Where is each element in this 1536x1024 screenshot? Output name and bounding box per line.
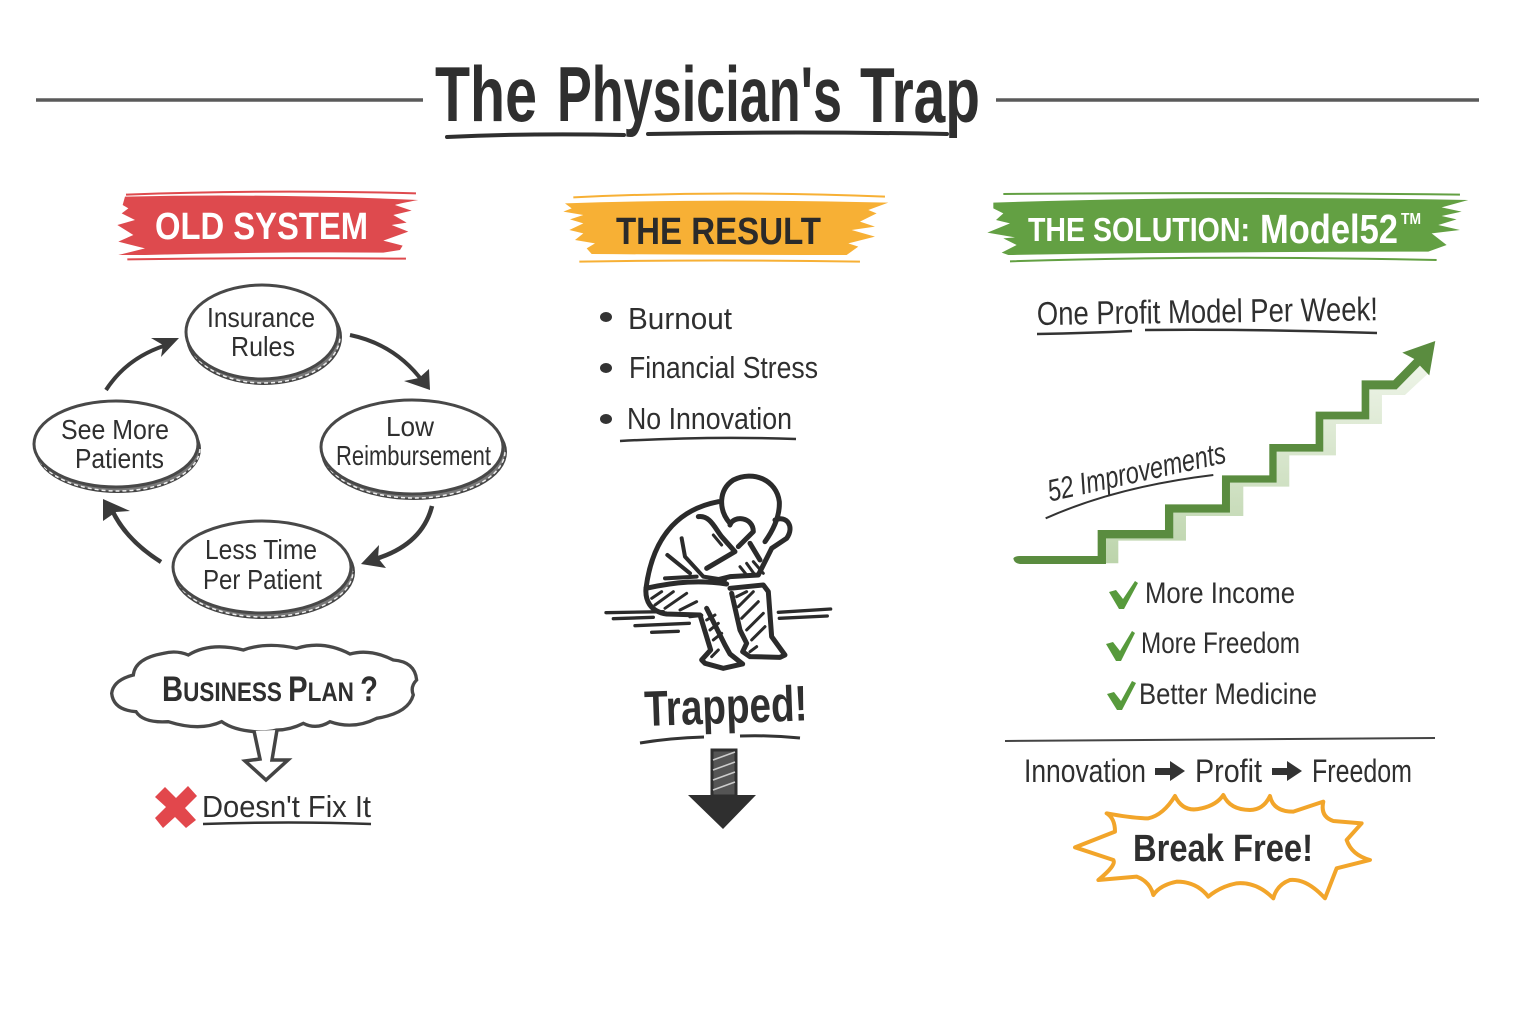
- title: Physician's: [557, 50, 842, 138]
- icon: check: [1107, 681, 1136, 710]
- flow: innovation profit freedom: Innovation: [1024, 753, 1146, 789]
- panel: the result: [563, 193, 888, 829]
- title: The: [435, 50, 537, 138]
- heading: the result banner: THE RESULT: [616, 211, 821, 253]
- arrow: outline down: [245, 730, 288, 780]
- node: insurance rules: Insurance: [207, 302, 315, 333]
- panel: the solution: [987, 193, 1468, 898]
- text: trapped: [640, 675, 808, 743]
- list: consequences: Financial Stress: [629, 350, 818, 385]
- node: low reimbursement: [321, 400, 506, 499]
- heading: old system banner: [117, 192, 418, 259]
- title: [36, 50, 1479, 139]
- list: benefits: More Income: [1145, 577, 1295, 610]
- text: one profit model: One Profit Model Per Week!: [1037, 290, 1378, 332]
- node: see more patients: See More: [61, 414, 169, 445]
- heading: the solution banner: [987, 193, 1468, 261]
- arrow: down: [688, 750, 756, 829]
- node: low reimbursement: Reimbursement: [336, 440, 491, 471]
- list: benefits: [1106, 577, 1317, 711]
- title: Trap: [860, 51, 980, 139]
- heading: the solution banner: Model52: [1260, 206, 1398, 252]
- list: consequences: Burnout: [628, 301, 732, 336]
- list: consequences: No Innovation: [627, 401, 792, 436]
- flow: innovation profit freedom: Profit: [1195, 753, 1262, 789]
- node: insurance rules: [186, 285, 341, 384]
- heading: the solution banner: THE SOLUTION:: [1028, 211, 1250, 248]
- heading: the solution banner: TM: [1401, 211, 1421, 228]
- icon: distressed person: [606, 476, 831, 668]
- node: less time per patient: [173, 521, 354, 618]
- callout: break free: [1075, 795, 1370, 898]
- arrow: to freedom: [1272, 761, 1302, 781]
- list: benefits: Better Medicine: [1139, 678, 1317, 711]
- cycle diagram: [34, 285, 506, 618]
- heading: old system banner: OLD SYSTEM: [155, 206, 368, 248]
- icon: check: [1106, 631, 1135, 661]
- label: 52 improvements: [1044, 436, 1229, 518]
- cloud: business plan: [112, 645, 417, 732]
- chart: rising staircase: [1013, 341, 1435, 564]
- arrow: more patients to rules: [106, 338, 179, 390]
- cloud: business plan: BUSINESS PLAN ?: [162, 670, 378, 709]
- arrow: to profit: [1155, 761, 1185, 781]
- arrow: time to more patients: [103, 499, 161, 562]
- list: benefits: More Freedom: [1141, 627, 1300, 660]
- node: less time per patient: Per Patient: [203, 564, 322, 595]
- label: 52 improvements: 52 Improvements: [1044, 436, 1229, 508]
- node: less time per patient: Less Time: [205, 534, 317, 565]
- list: consequences: [600, 301, 818, 441]
- node: see more patients: Patients: [75, 443, 164, 474]
- arrow: rules to reimbursement: [350, 335, 430, 390]
- flow: innovation profit freedom: Freedom: [1312, 753, 1412, 789]
- icon: check: [1109, 581, 1138, 609]
- arrow: reimbursement to time: [361, 506, 432, 568]
- node: low reimbursement: Low: [386, 411, 435, 442]
- text: doesn't fix it: Doesn't Fix It: [202, 789, 371, 824]
- panel: old system: [34, 192, 506, 828]
- icon: red x: [155, 786, 197, 828]
- heading: the result banner: [563, 193, 888, 262]
- node: insurance rules: Rules: [231, 331, 295, 362]
- text: trapped: Trapped!: [643, 675, 808, 737]
- callout: break free: Break Free!: [1133, 828, 1313, 870]
- node: see more patients: [34, 401, 200, 492]
- flow: innovation profit freedom: [1024, 753, 1412, 789]
